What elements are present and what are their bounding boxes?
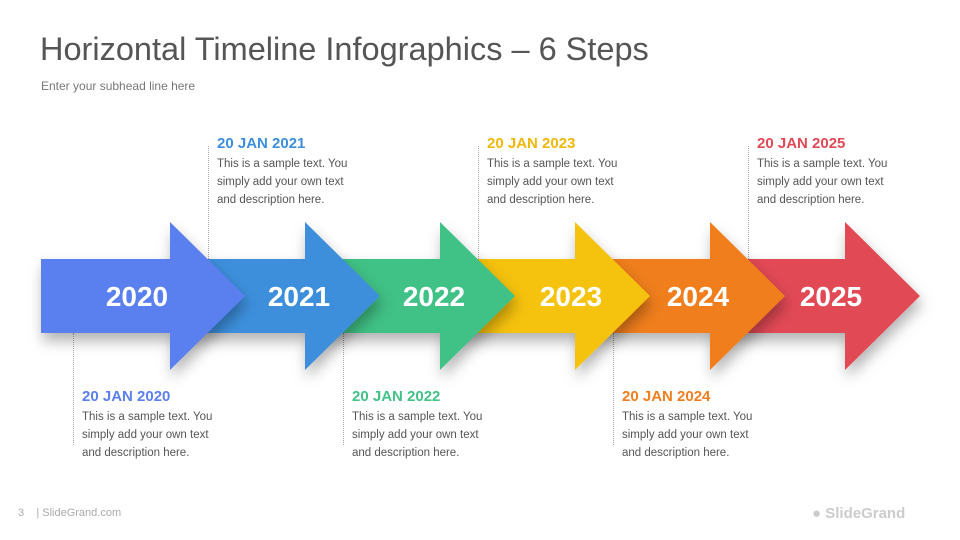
text: 2024: This is a sample text. You simply add your own text and description here.	[622, 411, 752, 459]
text: 2022: 20 JAN 2022	[352, 388, 440, 405]
text: 2020: 20 JAN 2020	[82, 388, 170, 405]
text: 2022: This is a sample text. You simply add your own text and description here.	[352, 411, 482, 459]
text: 2023: This is a sample text. You simply add your own text and description here.	[487, 158, 617, 206]
text: 2021: This is a sample text. You simply add your own text and description here.	[217, 158, 347, 206]
text: 2021: 20 JAN 2021	[217, 135, 305, 152]
arrow 2025	[716, 222, 920, 370]
text: 2020	[82, 388, 212, 459]
text: 2024: 20 JAN 2024	[622, 388, 710, 405]
arrow 2022	[311, 222, 515, 370]
arrow 2023: 2023	[540, 281, 602, 312]
arrow 2022: 2022	[403, 281, 465, 312]
arrow 2021: 2021	[268, 281, 330, 312]
title: Horizontal Timeline Infographics – 6 Steps	[40, 31, 649, 67]
text: 2025: 20 JAN 2025	[757, 135, 845, 152]
footer logo: ● SlideGrand	[812, 505, 905, 522]
arrow 2021	[176, 222, 380, 370]
arrow 2023	[446, 222, 650, 370]
arrow 2020: 2020	[106, 281, 168, 312]
text: 2022	[352, 388, 482, 459]
text: 2024	[622, 388, 752, 459]
text: 2023	[487, 135, 617, 206]
text: 2025	[757, 135, 887, 206]
text: 2023: 20 JAN 2023	[487, 135, 575, 152]
arrow 2020	[41, 222, 245, 370]
text: 2020: This is a sample text. You simply add your own text and description here.	[82, 411, 212, 459]
text: 2025: This is a sample text. You simply add your own text and description here.	[757, 158, 887, 206]
subtitle: Enter your subhead line here	[41, 79, 195, 93]
footer page number: 3 | SlideGrand.com	[18, 507, 121, 519]
arrow 2025: 2025	[800, 281, 862, 312]
arrow 2024	[581, 222, 785, 370]
arrow 2024: 2024	[667, 281, 730, 312]
text: 2021	[217, 135, 347, 206]
